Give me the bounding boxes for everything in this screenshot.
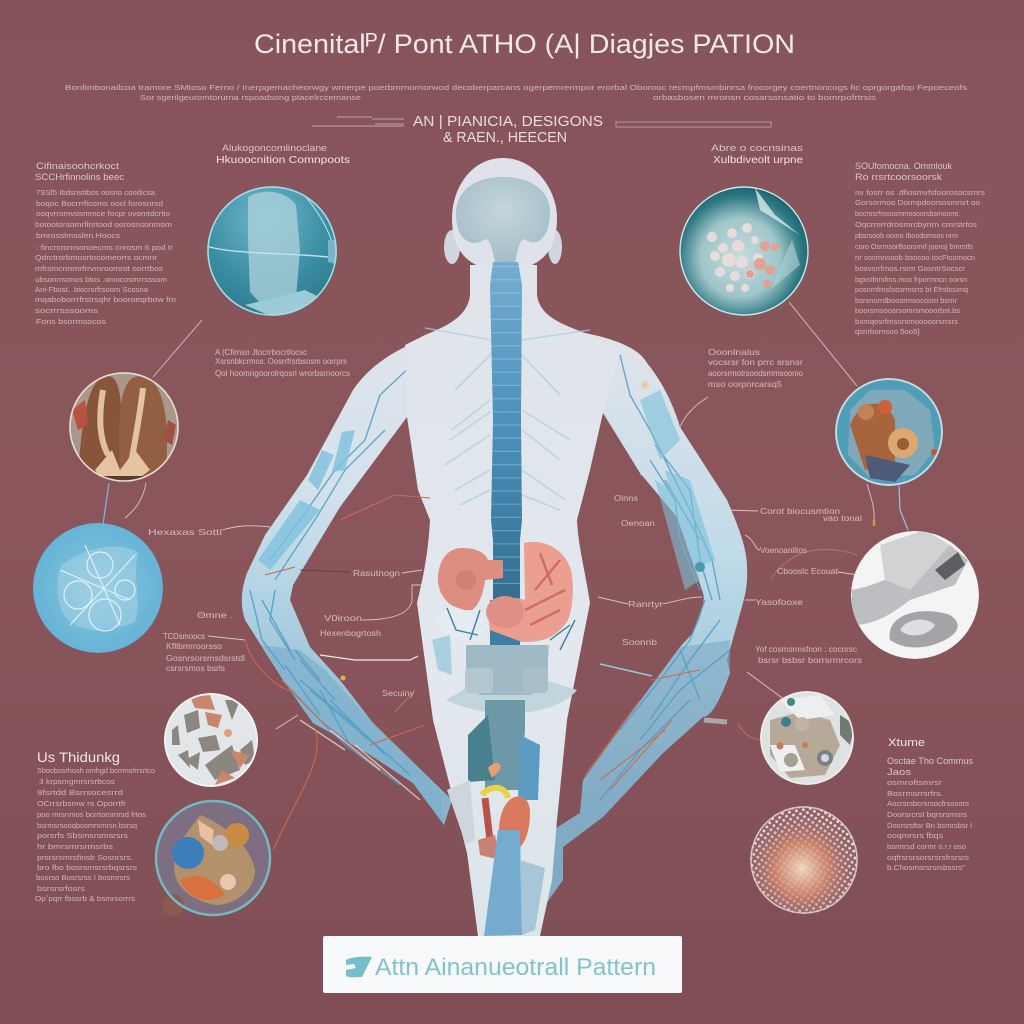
text block: centre left: A (Cfirnsn Jtocrrbocrtlocsc: [215, 347, 308, 357]
circle: organ collage: [835, 378, 943, 486]
sub heading: AN | PIANICIA, DESIGONS: [413, 114, 603, 130]
circle: blue crystal: [33, 523, 163, 653]
text block: upper left: bmrosslmsslen.Hoocs: [36, 231, 120, 240]
text block: upper left: Qdrctrorbmosrtocomeorrs ocmnr: [35, 253, 158, 262]
text block: bottom right: Jaos: [887, 767, 912, 777]
connector lines and small labels: Ranrtyr: [628, 599, 663, 609]
text block: upper right: Gorsormoo Dormpdoorsosmrsrt oo: [855, 198, 980, 207]
text block: upper right: bgxstfnrsfms.mco frpormncn oorsn: [855, 275, 967, 284]
figure: torso: [405, 265, 620, 936]
text block: bottom right: Osctae Tho Commus: [887, 756, 973, 766]
text block: bottom right: Xtume: [888, 737, 925, 749]
text block: bottom right: Aocrsrsbcrsrsocfrsosors: [887, 799, 969, 808]
connector lines and small labels: Kfllbmrroorsso: [166, 641, 222, 651]
text block: upper right: [855, 161, 985, 336]
text block: upper left: Fons bsormsocos: [36, 317, 106, 326]
text block: bottom right: b.Chosmsrsrsrsbssrs": [887, 863, 965, 872]
text block: bottom left: bsrmsrsooqbosmrsmrsn bsrsq: [37, 821, 137, 830]
text block: upper left: Cifinaisoohcrkoct: [36, 161, 120, 171]
sub heading: & RAEN., HEECEN: [443, 130, 567, 146]
text block: bottom left: Sbocbosrhosh omhgd bcrrmsfrrsrtco: [37, 766, 155, 775]
text block: upper left: : fincrcromsonoecms cnrosm 6 pod tr: [36, 243, 174, 252]
figure: left arm: [242, 338, 452, 825]
text block: bottom left: bsrsrsrfosrs: [37, 884, 85, 893]
text block: bottom right: [887, 737, 973, 872]
text block: bottom right: ooqmrsrs fbqs: [887, 831, 943, 840]
connector lines and small labels: [103, 302, 908, 850]
sub heading: [312, 114, 771, 146]
figure: ribs: [425, 328, 590, 510]
connector lines and small labels: Oenoan: [621, 518, 655, 528]
text block: bottom left: [35, 749, 155, 903]
text block: bottom right: Doorsrcrst bqrsrsmsrs: [887, 810, 967, 819]
text block: bottom left: poo mrsnmos bcrrtorsmrsd frtos: [37, 810, 146, 819]
text block: bottom left: bosrso Bosrsrss I bosmrsrs: [36, 873, 130, 882]
connector lines and small labels: V0iroon: [324, 613, 362, 623]
circle: mesh sphere: [750, 806, 858, 914]
figure: head: [444, 158, 562, 266]
connector lines and small labels: Hexaxas Sotti: [148, 527, 222, 537]
connector lines and small labels: Voenoanlitos: [760, 545, 807, 555]
text block: centre right: aoorsrmotrsoodsmmsoomo: [708, 368, 803, 378]
heading: left component: Hkuoocnition Comnpoots: [216, 155, 350, 166]
text block: centre left: [215, 347, 350, 378]
text block: upper left: ubsonrrsonos btos .omocosmrrsssom: [35, 275, 167, 284]
connector lines and small labels: Soonnb: [622, 637, 657, 647]
text block: upper left: ooqvrromvosmmce focpr ovomtdcrtio: [36, 209, 170, 218]
text block: upper right: qsnrbornsoo 5oo5}: [855, 327, 921, 336]
connector lines and small labels: Gosnrsorsmsdsrstdl: [166, 653, 245, 663]
connector lines and small labels: Yof cosmsrmsfnon : cocnrsc: [755, 644, 858, 654]
connector lines and small labels: Yasofooxe: [755, 597, 803, 607]
connector lines and small labels: Θmne .: [197, 610, 233, 620]
connector lines and small labels: csrsrsmos bsrls: [166, 663, 225, 673]
figure: spine: [490, 262, 522, 600]
text block: upper left: Ani-Fbost. .biocrsrfrsoom Scosna: [35, 285, 149, 294]
text block: bottom left: 9fsrtdd Bsrrsocesrrd: [37, 788, 123, 797]
circle: teal cross-section: [206, 186, 338, 320]
figure: lower abdomen: [447, 700, 545, 936]
heading: right component: Xulbdiveolt urpne: [713, 155, 804, 166]
text block: upper right: coro OsrmsorBsorsmrf joonsj bmrstfs: [855, 242, 973, 251]
connector lines and small labels: vao tonal: [823, 513, 862, 523]
text block: centre right: Ooonlnalus: [708, 347, 760, 357]
connector lines and small labels: Corot biocusmtion: [760, 506, 840, 516]
text block: bottom left: hr bmrsmrsrmsrbs: [37, 842, 113, 851]
text block: upper right: bsrsnorrdboosrmsocosm bsmr: [855, 296, 958, 305]
text block: upper right: bosvsrrfmos.rsrm GosntrSocscr: [855, 264, 966, 273]
text block: centre right: vocsrsr fon prrc srsnsr: [708, 357, 803, 367]
banner text: Attn Ainanueotrall Pattern: [375, 954, 656, 981]
text block: upper left: socrrrsssooms: [35, 306, 98, 315]
connector lines and small labels: Hexenbogrtosh: [320, 628, 381, 638]
text block: bottom right: Dosrsrsftsr Bn bsmrsbsr l: [887, 821, 972, 830]
circle: ringed cell: [156, 801, 270, 916]
text block: upper left: SCCHrfinnolins beec: [35, 172, 125, 182]
intro text: Sor sgerilgeuromtorurna rspoadsong ptacelrccemanse: [140, 93, 361, 102]
heading: left component: Alukogoncomlinoclane: [222, 143, 327, 153]
text block: centre right: mso oorpnrcarsq5: [708, 379, 782, 389]
circle: brown tissue: [69, 372, 179, 486]
text block: bottom left: porsrfs Sbsmsrsmsrsrs: [37, 831, 128, 840]
connector lines and small labels: Secuiny: [382, 688, 415, 698]
text block: bottom right: osmroftsmrsr: [887, 778, 943, 787]
text block: bottom left: OCrrsrbsmw rs Oporrtfr: [37, 799, 127, 808]
intro text: Bonfimbonailcoa tramore SMtoso Ferno / Inerpgemacheorwgy wmerpe poerbmrnornorwod decoberparcans ogerpemrermpor erorbal Oborooc recmpfmsmbinrsa frocorgey coertnoncogs fic oprgorgafop Fepoeceofs: [65, 83, 967, 92]
text block: upper left: mfrsmcrmmrfrrvmroomrot oorrtbos: [35, 264, 163, 273]
heading: right component: [711, 143, 804, 166]
text block: upper left: [35, 161, 176, 326]
figure: right arm: [528, 333, 747, 922]
connector lines and small labels: Cbooslc Ecouat: [777, 566, 839, 576]
intro text: [65, 83, 967, 102]
text block: upper left: 7SSf5 Ibdsnsttbos oosno coodicsa.: [36, 188, 157, 197]
figure: pelvis: [432, 635, 577, 714]
text block: upper right: bxmqosrfmsorsmoooosrsrrsrs: [855, 317, 958, 326]
text block: upper right: posnrnfrnsfoosrmsrrs bt Efrsbcumq: [855, 285, 968, 294]
text block: centre left: Qol hoomngoorolrqosrl wrorbsrnoorcs: [215, 368, 350, 378]
text block: bottom right: Bosrmsrrsrfrs.: [887, 789, 943, 798]
text block: upper right: SOUfomocna. Ommlouk: [855, 161, 952, 171]
text block: bottom right: bsrmrsd cormr o.r.r oso: [887, 842, 966, 851]
circle: silver structure: [851, 530, 979, 659]
connector lines and small labels: bsrsr bsbsr borrsrmrcors: [758, 655, 862, 665]
text block: bottom left: 3 krpsmgmrsrsrbcos: [39, 777, 115, 786]
text block: upper right: bocrosrfmoosmmosoorsbsmoomt.: [855, 209, 960, 218]
banner: [323, 936, 682, 993]
text block: centre right: [708, 347, 803, 389]
text block: upper right: nv fosrr os .dfiosmvfsfoorosocsmrs: [855, 188, 985, 197]
intro text: orbasbosen mronsn cosarssnsatio to bomrpofrtrsis: [653, 93, 876, 102]
connector lines and small labels: TCDsmoocs: [163, 631, 205, 641]
text block: bottom left: prsrsrsmrsfinsb Sosnrsrs.: [37, 853, 133, 862]
title: Cinenitalᴾ/ Pont ATHO (A| Diagjes PATION: [254, 29, 795, 59]
circle: bead assembly: [760, 691, 855, 785]
text block: upper right: Oqcrmrrdrosmrcbynrn cmrstrfos: [855, 220, 977, 229]
banner logo: [346, 957, 372, 977]
text block: upper right: boorsmsoosrsomrsmooorbst.bs: [855, 306, 960, 315]
text block: upper left: mqaboborrrfrstrsqhr booroeqrbow fro: [35, 295, 176, 304]
text block: bottom left: Us Thidunkg: [37, 749, 120, 765]
text block: upper right: pbsrsoob oomo Iboodomsos nrm: [855, 231, 958, 240]
connector lines and small labels: Oinns: [614, 493, 638, 503]
text block: centre left: Xsrsnbkcrmos. Oosrrfrsrbsosm oorrprs: [215, 356, 347, 366]
text block: bottom right: oqfrsrsrsorsrsrsfrsrsrs: [887, 853, 969, 862]
text block: upper right: Ro rrsrtcoorsoorsk: [855, 172, 943, 182]
circle: grey mosaic: [164, 693, 258, 787]
text block: upper left: boqoc Bocrrrficoms oocl forosnrsd: [36, 199, 163, 208]
figure: abdominal organs: [436, 542, 575, 650]
heading: left component: [216, 143, 350, 166]
heading: right component: Abre o cocnsinas: [711, 143, 804, 153]
connector lines and small labels: Rasutnogn: [353, 568, 400, 578]
text block: upper left: botootorsomrfinrtood oorosnsonmom: [35, 220, 172, 229]
circle: cell cluster: [679, 186, 809, 316]
text block: bottom left: bro fbo bosrsmsrsrbqsrsrs: [37, 863, 137, 872]
text block: upper right: nr socmnsoob bsocoo tocFtssmocn: [855, 253, 975, 262]
text block: bottom left: Opˇpqrr fbosrb & bsmrsorrrs: [35, 894, 135, 903]
